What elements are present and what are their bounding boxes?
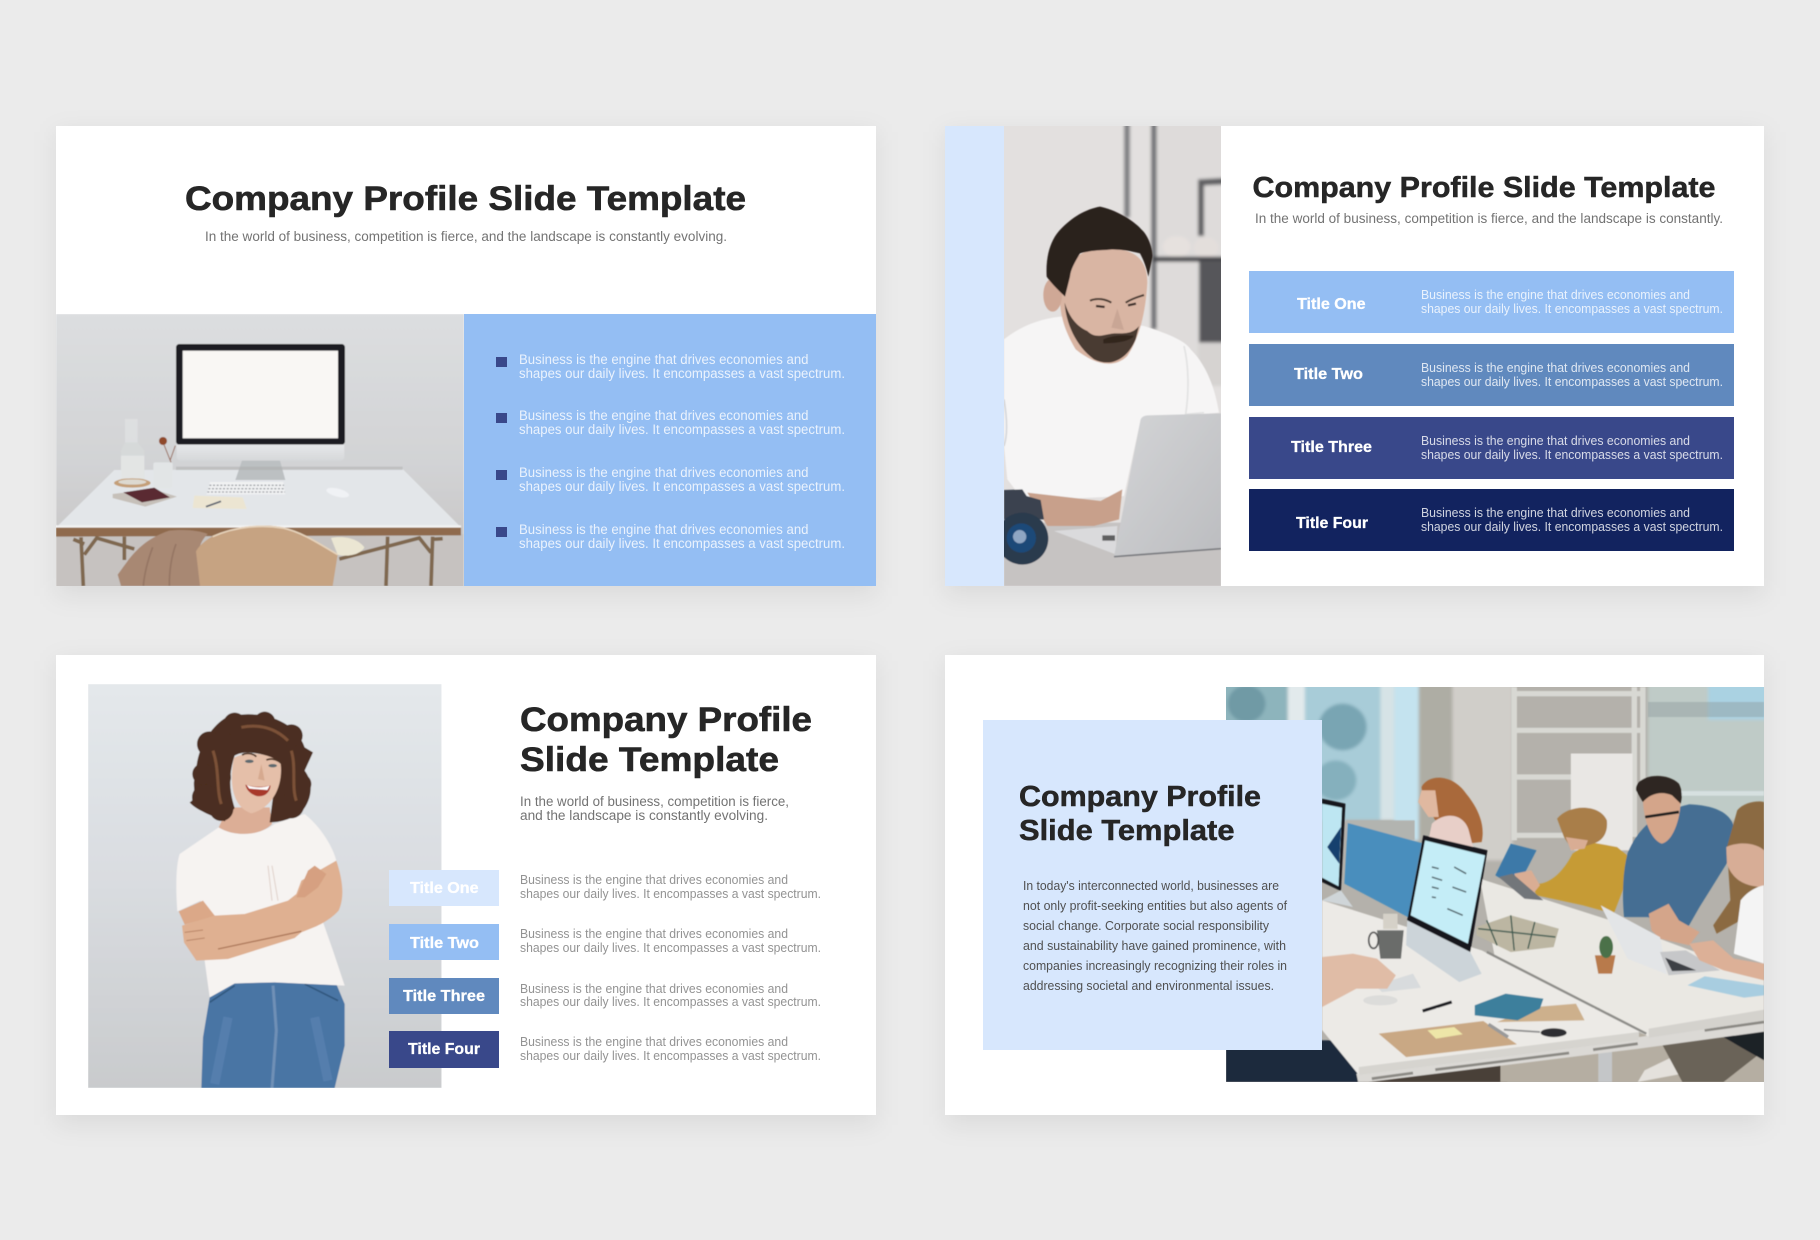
slide 4 title — [1019, 781, 1261, 847]
tag: title four: Title Four — [408, 1041, 480, 1058]
description one — [520, 873, 821, 901]
carafe and glass — [114, 419, 175, 488]
back woman — [1418, 778, 1483, 847]
camera — [1004, 488, 1049, 566]
tablet — [1687, 976, 1764, 998]
description two: Business is the engine that drives economies and — [520, 927, 788, 941]
bar: title one: shapes our daily lives. It encompasses a vast spectrum. — [1421, 302, 1723, 316]
head — [1043, 207, 1152, 364]
blanket — [118, 530, 208, 586]
bullet 1: Business is the engine that drives economies and — [519, 352, 808, 367]
keyboard — [207, 482, 285, 494]
slide 3 title: Slide Template — [520, 741, 779, 779]
tag: title one: Title One — [410, 880, 479, 897]
bullet 2: shapes our daily lives. It encompasses a vast spectrum. — [519, 422, 845, 437]
bar: title four: shapes our daily lives. It encompasses a vast spectrum. — [1421, 520, 1723, 534]
jeans — [201, 980, 345, 1088]
bar: title four — [1249, 489, 1734, 551]
slide 1 title: Company Profile Slide Template — [185, 180, 746, 218]
bar: title three — [1249, 417, 1734, 479]
tag: title two: Title Two — [410, 935, 479, 952]
shirt — [176, 814, 345, 997]
description four: Business is the engine that drives economies and — [520, 1035, 788, 1049]
slide 1 subtitle: In the world of business, competition is fierce, and the landscape is constantly evolving. — [205, 229, 727, 244]
description one: shapes our daily lives. It encompasses a vast spectrum. — [520, 887, 821, 901]
bullet 2 — [496, 408, 845, 437]
floor and under-desk area — [1226, 1040, 1370, 1082]
slide 3 subtitle — [520, 794, 789, 823]
far desk — [1346, 820, 1415, 840]
bullet 4 — [496, 522, 845, 551]
slide 4 paragraph: not only profit-seeking entities but also agents of — [1023, 899, 1288, 913]
description two — [520, 927, 821, 955]
bullet 4: Business is the engine that drives economies and — [519, 522, 808, 537]
photo: man working on a laptop — [1004, 126, 1221, 586]
bar: title two: shapes our daily lives. It encompasses a vast spectrum. — [1421, 375, 1723, 389]
slide 4 paragraph: addressing societal and environmental issues. — [1023, 979, 1274, 993]
clipboard — [1379, 1021, 1517, 1057]
mouse — [326, 488, 348, 498]
panel: slide 2 man with laptop and four bars — [945, 119, 1764, 596]
description four: shapes our daily lives. It encompasses a vast spectrum. — [520, 1049, 821, 1063]
chair — [196, 526, 338, 586]
bullet 2: Business is the engine that drives economies and — [519, 408, 808, 423]
bar: title one: Business is the engine that drives economies and — [1421, 288, 1690, 302]
bullet list panel — [464, 314, 876, 586]
text box — [983, 720, 1322, 1050]
bar: title three: shapes our daily lives. It encompasses a vast spectrum. — [1421, 448, 1723, 462]
slide 2 subtitle: In the world of business, competition is fierce, and the landscape is constantly. — [1255, 211, 1723, 226]
slide 4 paragraph: In today's interconnected world, businesses are — [1023, 879, 1279, 893]
cactus plant — [1595, 936, 1615, 974]
bullet 4: shapes our daily lives. It encompasses a vast spectrum. — [519, 536, 845, 551]
description two: shapes our daily lives. It encompasses a vast spectrum. — [520, 941, 821, 955]
slide 4 title: Company Profile — [1019, 781, 1261, 813]
bullet 3: shapes our daily lives. It encompasses a vast spectrum. — [519, 479, 845, 494]
face — [232, 753, 281, 813]
hair — [190, 712, 313, 822]
man in blue sweater — [1623, 776, 1734, 945]
girl in white hoodie — [1689, 801, 1764, 980]
bullet 3 — [496, 465, 845, 494]
bullet 3: Business is the engine that drives economies and — [519, 465, 808, 480]
bullet 1 — [496, 352, 845, 381]
bar: title two: Title Two — [1294, 366, 1363, 383]
slide 4 paragraph: and sustainability have gained prominence, with — [1023, 939, 1286, 953]
slide 4 paragraph — [1023, 879, 1288, 993]
books — [113, 488, 177, 507]
bar: title three: Title Three — [1291, 439, 1372, 456]
boy in yellow hoodie — [1499, 808, 1629, 914]
teal folder stack — [1475, 994, 1585, 1022]
desk rail — [1356, 1019, 1764, 1082]
slide 3 subtitle: In the world of business, competition is fierce, — [520, 794, 789, 809]
arms — [179, 861, 342, 961]
description three — [520, 982, 821, 1009]
left monitor — [1322, 799, 1353, 907]
bar: title one: Title One — [1297, 296, 1366, 313]
panel: slide 3 woman with four tags — [56, 655, 876, 1125]
tag: title two — [389, 924, 499, 960]
photo: team in open office — [1219, 680, 1772, 1090]
blue divider — [1344, 823, 1422, 917]
bar: title two — [1249, 344, 1734, 406]
mouse and pen — [1363, 995, 1452, 1011]
laptop on desk — [1601, 905, 1720, 975]
laptop — [1054, 413, 1221, 557]
description three: Business is the engine that drives economies and — [520, 982, 788, 996]
bar: title four: Title Four — [1296, 515, 1368, 532]
arm — [1027, 489, 1122, 526]
photo: smiling woman with crossed arms — [88, 684, 442, 1088]
slide 3 subtitle: and the landscape is constantly evolving. — [520, 808, 768, 823]
slide 2 title: Company Profile Slide Template — [1252, 172, 1716, 204]
bullet 1: shapes our daily lives. It encompasses a vast spectrum. — [519, 366, 845, 381]
tag: title one — [389, 870, 499, 906]
main imac — [1406, 835, 1487, 982]
panel: slide 4 office team photo with text box — [945, 655, 1772, 1125]
desks — [1480, 879, 1764, 1037]
notebook — [193, 496, 247, 509]
cup — [1369, 914, 1404, 959]
slide 4 paragraph: companies increasingly recognizing their roles in — [1023, 959, 1287, 973]
second blue chair — [1495, 844, 1537, 884]
table — [1004, 523, 1221, 586]
neck — [219, 807, 272, 834]
photo: desk with monitor — [56, 314, 464, 587]
bar: title four: Business is the engine that drives economies and — [1421, 506, 1690, 520]
description four — [520, 1035, 821, 1063]
slide 4 paragraph: social change. Corporate social responsibility — [1023, 919, 1270, 933]
description one: Business is the engine that drives economies and — [520, 873, 788, 887]
tag: title four — [389, 1031, 499, 1068]
keyboard and hands — [1322, 954, 1421, 1007]
whiteboard — [1571, 754, 1633, 850]
slide 4 title: Slide Template — [1019, 815, 1234, 847]
wire basket — [1476, 915, 1559, 952]
slide 3 title — [520, 701, 812, 779]
shirt — [1004, 317, 1219, 501]
tag: title three — [389, 978, 499, 1014]
bar: title one — [1249, 271, 1734, 333]
bar: title three: Business is the engine that drives economies and — [1421, 434, 1690, 448]
pocket line — [268, 866, 278, 901]
panel: slide 1 desk photo with bullet list — [56, 126, 876, 596]
slide 3 title: Company Profile — [520, 701, 812, 739]
scissors — [1504, 1028, 1567, 1037]
description three: shapes our daily lives. It encompasses a vast spectrum. — [520, 995, 821, 1009]
bar: title two: Business is the engine that drives economies and — [1421, 361, 1690, 375]
tag: title three: Title Three — [403, 988, 485, 1005]
